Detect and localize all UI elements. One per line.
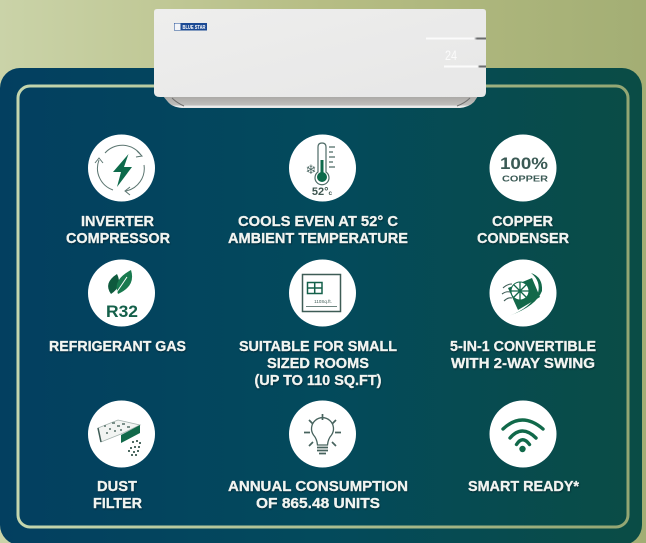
feature: suitable for small rooms: SUITABLE FOR SMALL	[239, 339, 397, 355]
display reading: 24	[445, 48, 457, 63]
feature: suitable for small rooms: SIZED ROOMS	[267, 356, 369, 372]
icon: 100% copper: COPPER	[502, 174, 548, 184]
feature: dust filter	[88, 400, 155, 512]
icon: lightning bolt with cycle arrows	[88, 134, 155, 202]
feature: annual consumption	[228, 400, 408, 512]
air conditioner unit	[154, 9, 486, 108]
feature: annual consumption: ANNUAL CONSUMPTION	[228, 479, 408, 495]
icon: 100% copper: 100%	[500, 154, 548, 173]
feature: smart ready: SMART READY*	[468, 479, 579, 495]
feature: suitable for small rooms	[239, 260, 397, 389]
feature: suitable for small rooms: (UP TO 110 SQ.FT)	[254, 373, 382, 389]
feature: 5-in-1 convertible	[450, 260, 596, 372]
icon: dust filter	[88, 400, 155, 468]
icon: light bulb	[289, 400, 356, 468]
brand logo: BLUE STAR	[182, 25, 206, 31]
icon: wifi	[490, 400, 556, 468]
icon: thermometer: ❄	[306, 162, 316, 177]
feature: copper condenser	[477, 134, 570, 247]
icon: thermometer: 52°c	[312, 186, 333, 198]
feature: inverter compressor: COMPRESSOR	[66, 231, 171, 247]
icon: thermometer	[289, 134, 356, 202]
feature: cools even at 52 C: COOLS EVEN AT 52° C	[238, 214, 399, 230]
feature: 5-in-1 convertible: WITH 2-WAY SWING	[451, 356, 595, 372]
brand logo	[174, 23, 207, 31]
icon: room plan 110 sq.ft: 110Sq.ft.	[314, 299, 332, 304]
panel frame	[18, 86, 628, 527]
icon: 100% copper	[490, 134, 556, 202]
feature: annual consumption: OF 865.48 UNITS	[256, 496, 380, 512]
feature: inverter compressor	[66, 134, 171, 247]
feature: dust filter: FILTER	[93, 496, 143, 512]
icon: room plan 110 sq.ft	[289, 260, 356, 326]
feature: smart ready	[468, 400, 579, 495]
feature: 5-in-1 convertible: 5-IN-1 CONVERTIBLE	[450, 339, 596, 355]
feature: copper condenser: COPPER	[492, 214, 554, 230]
feature: R32 refrigerant gas: REFRIGERANT GAS	[49, 339, 186, 355]
feature: cools even at 52 C: AMBIENT TEMPERATURE	[228, 231, 408, 247]
feature: cools even at 52 C	[228, 134, 408, 247]
feature: copper condenser: CONDENSER	[477, 231, 570, 247]
icon: leaves R32: R32	[106, 303, 138, 321]
feature: R32 refrigerant gas	[49, 260, 186, 355]
feature: dust filter: DUST	[97, 479, 137, 495]
icon: fan with swing	[490, 260, 556, 326]
feature: inverter compressor: INVERTER	[81, 214, 155, 230]
